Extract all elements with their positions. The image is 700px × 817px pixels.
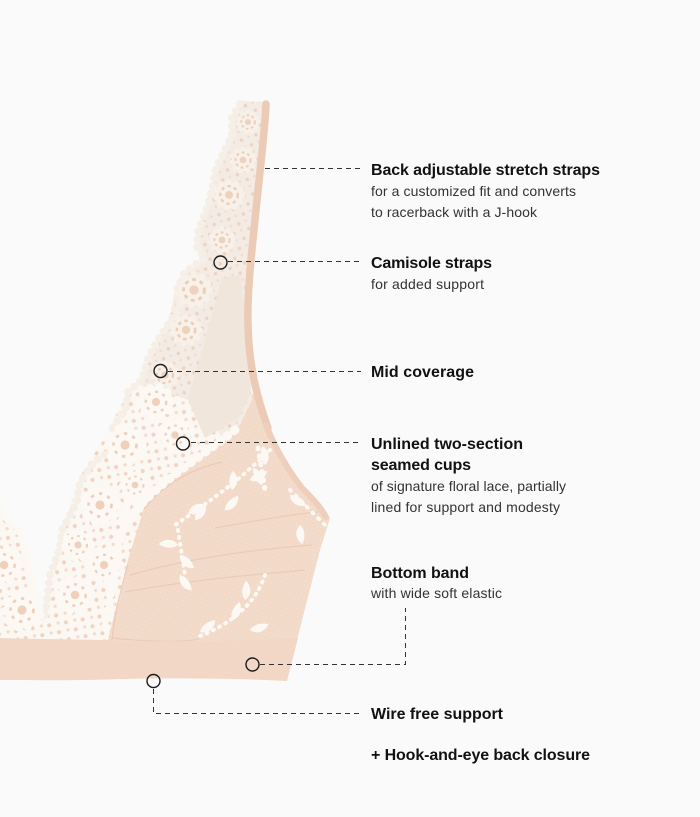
callout: wire free support [147,674,504,723]
illustration: bra [0,101,330,681]
lace rosettes: lower [59,386,189,611]
armhole binding [266,425,326,517]
callout: unlined two-section seamed cups: Unlined two-section [371,436,523,453]
callout: back adjustable stretch straps: for a customized fit and converts [371,183,576,199]
callout: back adjustable stretch straps: Back adjustable stretch straps [371,162,600,179]
callout: unlined two-section seamed cups: lined for support and modesty [371,499,560,515]
scalloped lace edge [44,104,240,622]
callout: unlined two-section seamed cups [176,436,566,515]
callout: back adjustable stretch straps [265,162,600,220]
callout: mid coverage [154,364,474,381]
callout: wire free support: Wire free support [371,706,504,723]
lace rosettes: upper [153,112,258,387]
callout: camisole straps [214,255,492,292]
bottom band [0,638,298,681]
note: hook-and-eye back closure: + Hook-and-eye back closure [371,747,590,764]
strap edge binding [248,104,268,428]
cup fabric [40,390,330,645]
lace leaves [159,446,308,634]
callout: unlined two-section seamed cups: of signature floral lace, partially [371,478,566,494]
callout: unlined two-section seamed cups: seamed cups [371,457,471,474]
left cup lace [0,503,43,640]
seams on cup [112,462,318,641]
callout: bottom band: with wide soft elastic [370,585,502,601]
sheer cream area [188,275,250,438]
callout: mid coverage: Mid coverage [371,364,474,381]
callout: camisole straps: for added support [371,276,484,292]
callout: back adjustable stretch straps: to racerback with a J-hook [371,204,538,220]
callout: bottom band [246,565,502,671]
callout: camisole straps: Camisole straps [371,255,492,272]
lace panel: lower centre front [43,385,225,640]
lace overlay sprays on cup [105,430,325,638]
callout: bottom band: Bottom band [371,565,469,582]
lace panel: upper strap [137,101,266,450]
